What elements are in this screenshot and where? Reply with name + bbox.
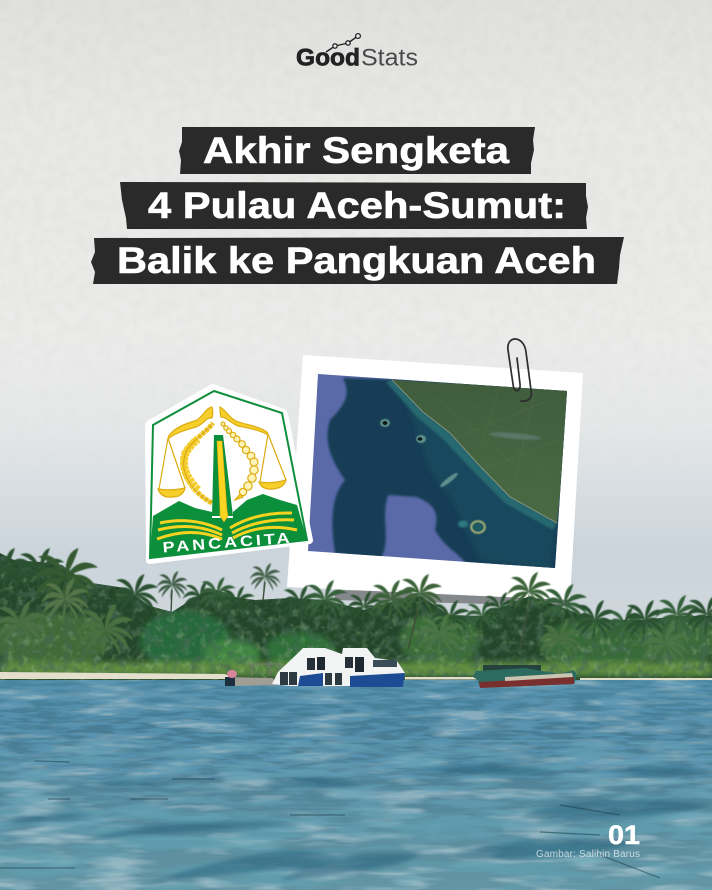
dark ripple streaks	[0, 761, 660, 878]
map island 4	[458, 520, 486, 534]
polaroid photo with satellite map	[287, 339, 583, 606]
paperclip	[508, 339, 531, 401]
palms	[0, 548, 712, 669]
island with palm trees	[0, 540, 712, 681]
background: paper and sky	[0, 0, 712, 620]
scales left	[158, 407, 213, 497]
title line 2	[120, 182, 588, 229]
polaroid shadow	[335, 420, 580, 606]
emblem white sticker	[145, 384, 313, 564]
logo: GoodStats	[296, 34, 418, 72]
boat: large patrol boat	[225, 648, 405, 687]
boat: wooden fishing boat	[473, 665, 577, 688]
title line 3: Balik ke Pangkuan Aceh	[117, 240, 596, 281]
logo: GoodStats: Stats	[361, 44, 418, 72]
satellite map	[308, 374, 567, 568]
photo credit: Gambar: Salihin Barus	[536, 849, 640, 860]
lit foliage patches	[0, 555, 712, 680]
title line 3	[91, 237, 624, 284]
tree mass	[0, 553, 712, 680]
pen	[212, 435, 233, 522]
small tender	[225, 677, 276, 686]
land	[392, 380, 570, 523]
large dark wave swells	[5, 764, 712, 882]
map island 1	[380, 419, 390, 427]
emblem green base and hills	[150, 494, 307, 558]
emblem green outline	[150, 391, 307, 558]
title: tape headline	[91, 127, 624, 284]
map island 2	[416, 435, 426, 443]
logo: GoodStats: Good	[296, 44, 360, 72]
open book	[157, 513, 297, 539]
page number: 01	[608, 820, 640, 850]
emblem: Aceh Pancacita	[145, 384, 313, 564]
beach	[0, 672, 712, 680]
water	[0, 678, 712, 890]
lone palm trunks	[171, 582, 530, 650]
title line 1: Akhir Sengketa	[203, 130, 509, 171]
emblem label: PANCACITA	[162, 529, 293, 556]
map island 3	[440, 472, 458, 488]
title line 1	[179, 127, 535, 174]
title line 2: 4 Pulau Aceh-Sumut:	[148, 185, 566, 226]
polaroid frame	[287, 355, 583, 600]
rice stalk	[184, 423, 213, 503]
pearl chain	[221, 422, 258, 500]
scales right	[220, 407, 286, 489]
